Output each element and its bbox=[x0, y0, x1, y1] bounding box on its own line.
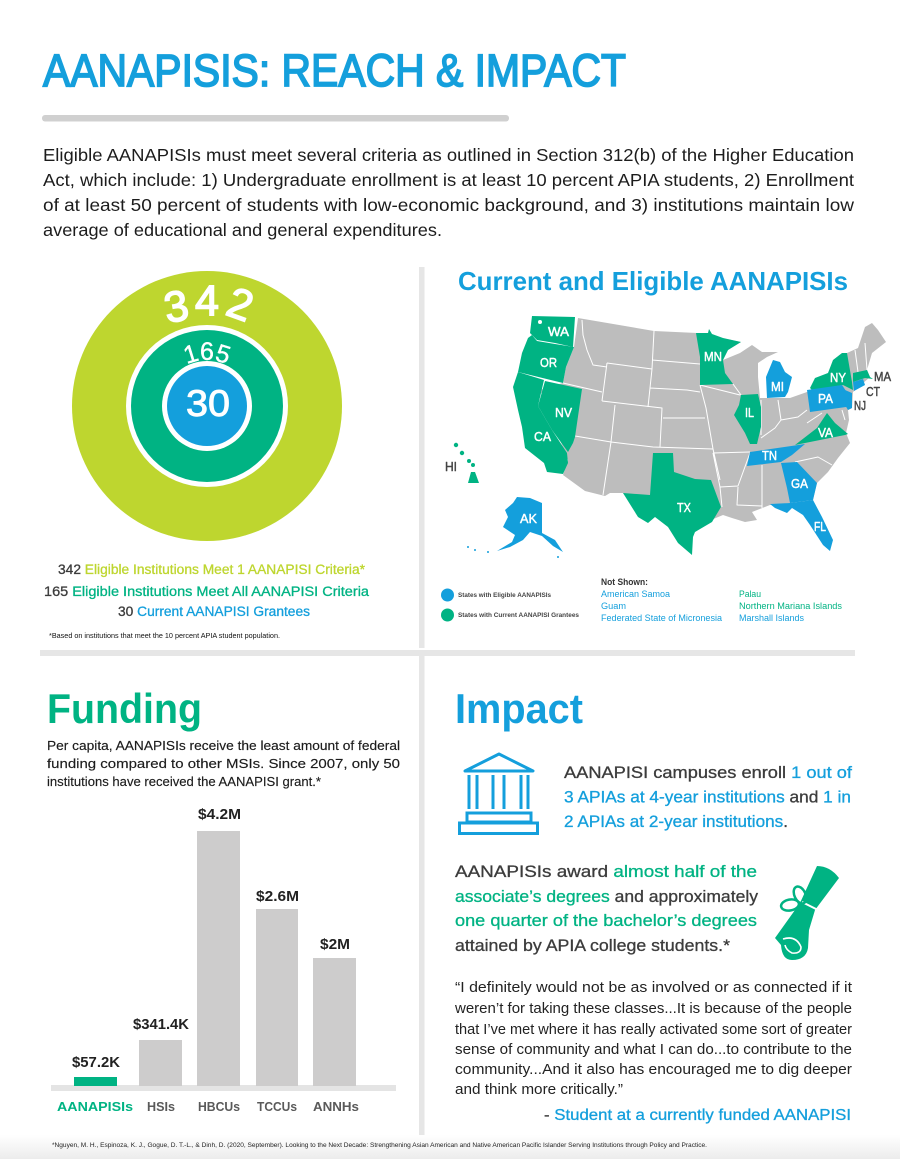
US map: NV bbox=[555, 405, 572, 420]
intro text: Eligible AANAPISIs must meet several criteria as outlined in Section 312(b) of the Higher Education bbox=[43, 145, 854, 165]
US map: HI bbox=[445, 459, 457, 474]
impact stat: enrollment: AANAPISI campuses enroll 1 out of bbox=[564, 764, 852, 782]
US map: IL bbox=[745, 405, 754, 420]
bar chart: HBCUs bbox=[198, 1099, 240, 1114]
icon: diploma scroll bbox=[775, 866, 839, 960]
intro text: of at least 50 percent of students with low-economic background, and 3) institutions maintain low bbox=[43, 195, 854, 215]
student quote: that I’ve met where it has really activated some sort of greater bbox=[455, 1022, 852, 1038]
bar chart: $4.2M bbox=[198, 806, 241, 823]
not shown list: Northern Mariana Islands bbox=[739, 601, 842, 611]
bar chart: $2M bbox=[320, 936, 350, 953]
student quote: weren’t for taking these classes...It is because of the people bbox=[454, 1001, 852, 1017]
title bbox=[42, 45, 626, 122]
circle legend: 165 Eligible Institutions Meet All AANAPISI Criteria bbox=[44, 584, 370, 599]
not shown list bbox=[601, 577, 842, 623]
impact stat: degrees: attained by APIA college students.* bbox=[455, 937, 731, 955]
not shown list: Not Shown: bbox=[601, 577, 648, 587]
US map bbox=[445, 316, 891, 558]
bar chart: HSIs bbox=[147, 1099, 175, 1114]
US map: MN bbox=[704, 349, 722, 364]
not shown list: Palau bbox=[739, 589, 761, 599]
circle footnote: *Based on institutions that meet the 10 percent APIA student population. bbox=[49, 631, 280, 640]
US map: MI bbox=[771, 379, 784, 394]
US map: MA bbox=[874, 369, 891, 384]
nested circles chart: 165 bbox=[184, 342, 231, 364]
icon: building bbox=[460, 754, 538, 834]
US map: NJ bbox=[854, 398, 866, 413]
impact stat: degrees: AANAPISIs award almost half of the bbox=[455, 863, 757, 881]
nested circles chart: 342 bbox=[160, 277, 259, 333]
map legend bbox=[441, 588, 580, 622]
map legend: States with Current AANAPISI Grantees bbox=[458, 613, 580, 619]
funding text: funding compared to other MSIs. Since 2007, only 50 bbox=[47, 757, 400, 771]
bar chart: $2.6M bbox=[256, 888, 299, 905]
student quote: and think more critically.” bbox=[455, 1082, 623, 1098]
student quote: sense of community and what I can do...to contribute to the bbox=[455, 1042, 852, 1058]
bar chart: ANNHs bbox=[313, 1099, 359, 1114]
US map: CA bbox=[534, 429, 551, 444]
student quote: community...And it also has encouraged me to dig deeper bbox=[455, 1062, 852, 1078]
funding text bbox=[47, 739, 400, 789]
US map: TX bbox=[677, 500, 691, 515]
impact heading: Impact bbox=[455, 685, 583, 732]
bar chart: $57.2K bbox=[72, 1054, 120, 1071]
US map: PA bbox=[818, 391, 833, 406]
US map: NY bbox=[830, 370, 846, 385]
bar chart: $341.4K bbox=[133, 1016, 189, 1033]
not shown list: American Samoa bbox=[601, 589, 670, 599]
impact stat: degrees bbox=[455, 863, 759, 955]
impact stat: degrees: associate’s degrees and approximately bbox=[455, 888, 759, 906]
US map: TN bbox=[762, 448, 777, 463]
map legend: States with Eligible AANAPISIs bbox=[458, 593, 552, 599]
map heading: Current and Eligible AANAPISIs bbox=[458, 266, 848, 296]
US map: AK bbox=[520, 511, 537, 526]
circle legend bbox=[44, 562, 370, 619]
US map: OR bbox=[540, 355, 557, 370]
intro text: average of educational and general expenditures. bbox=[43, 220, 442, 240]
impact stat: enrollment: 2 APIAs at 2-year institutions . bbox=[564, 813, 788, 831]
student quote bbox=[454, 980, 852, 1098]
quote attribution: - Student at a currently funded AANAPISI bbox=[544, 1107, 851, 1124]
impact stat: degrees: one quarter of the bachelor’s degrees bbox=[455, 912, 757, 930]
impact stat: enrollment bbox=[564, 764, 852, 831]
circle legend: 342 Eligible Institutions Meet 1 AANAPISI Criteria* bbox=[58, 562, 366, 577]
nested circles chart: 30 bbox=[186, 383, 230, 424]
funding heading: Funding bbox=[47, 685, 202, 732]
bar chart: AANAPISIs bbox=[57, 1099, 133, 1114]
not shown list: Federated State of Micronesia bbox=[601, 613, 722, 623]
bar chart bbox=[51, 806, 396, 1114]
US map: CT bbox=[866, 384, 880, 399]
circle legend: 30 Current AANAPISI Grantees bbox=[118, 604, 310, 619]
student quote: “I definitely would not be as involved or as connected if it bbox=[455, 980, 852, 996]
US map: FL bbox=[814, 519, 826, 534]
intro text: Act, which include: 1) Undergraduate enrollment is at least 10 percent APIA students, 2) Enrollment bbox=[43, 170, 854, 190]
funding text: institutions have received the AANAPISI grant.* bbox=[47, 775, 321, 789]
title: AANAPISIS: REACH & IMPACT bbox=[43, 45, 626, 96]
funding text: Per capita, AANAPISIs receive the least amount of federal bbox=[47, 739, 400, 753]
intro text bbox=[43, 145, 854, 240]
not shown list: Guam bbox=[601, 601, 626, 611]
US map: WA bbox=[548, 324, 569, 339]
citation footnote: *Nguyen, M. H., Espinoza, K. J., Gogue, D. T.-L., & Dinh, D. (2020, September). Looking to the Next Decade: Strengthening Asian American and Native American Pacific Islander Serving Institutions through Policy and Practice. bbox=[52, 1143, 707, 1149]
impact stat: enrollment: 3 APIAs at 4-year institutions and 1 in bbox=[564, 788, 851, 806]
nested circles chart bbox=[72, 271, 342, 541]
US map: GA bbox=[791, 476, 808, 491]
US map: VA bbox=[818, 425, 833, 440]
not shown list: Marshall Islands bbox=[739, 613, 804, 623]
bar chart: TCCUs bbox=[257, 1099, 297, 1114]
